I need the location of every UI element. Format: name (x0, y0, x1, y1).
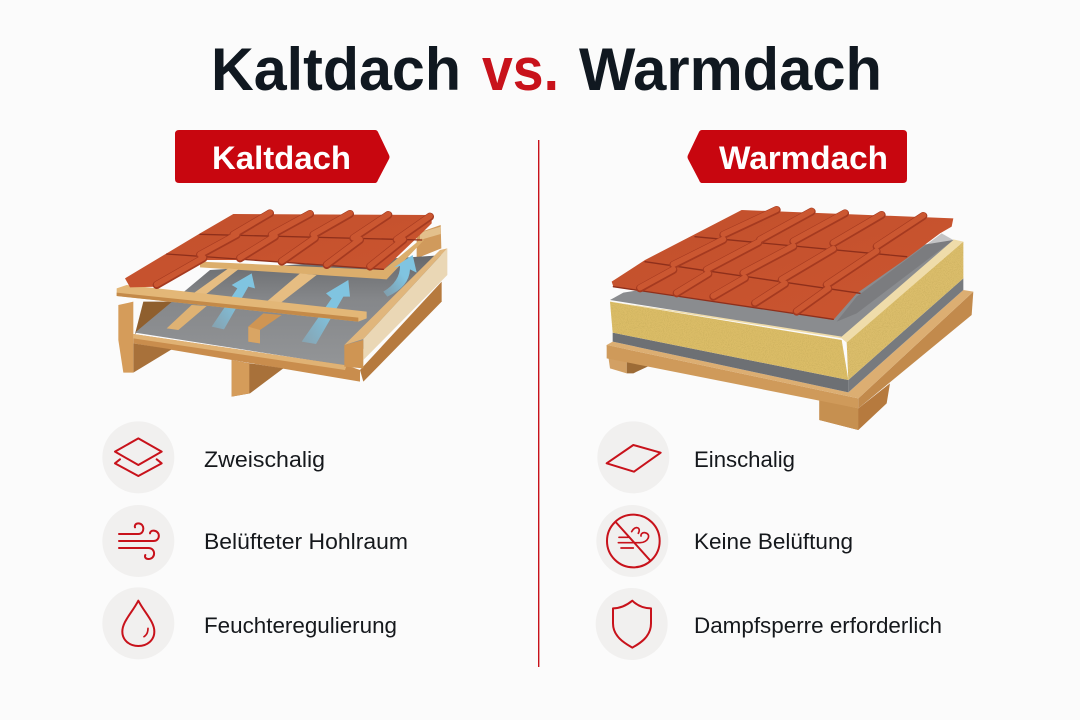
title: Kaltdach (211, 36, 461, 103)
badge: Warmdach: Warmdach (719, 140, 888, 176)
airflow arrow 2 (302, 280, 350, 344)
label: Belüfteter Hohlraum: Belüfteter Hohlraum (204, 529, 408, 554)
label: Feuchteregulierung: Feuchteregulierung (204, 613, 397, 638)
title: Warmdach (579, 36, 882, 103)
top membrane (610, 240, 953, 337)
title: vs. (482, 36, 559, 103)
label: Keine Belüftung: Keine Belüftung (694, 529, 853, 554)
icon: water drop (Feuchteregulierung) (102, 587, 174, 659)
badge: Warmdach (688, 130, 907, 183)
airflow arrow 3 (383, 255, 417, 297)
icon: single layer (Einschalig) (597, 421, 669, 493)
badge: Kaltdach: Kaltdach (212, 140, 351, 176)
roof tiles (125, 213, 432, 287)
label: Zweischalig: Zweischalig (204, 447, 325, 472)
roof tiles (612, 209, 953, 320)
insulation layer (610, 239, 963, 380)
icon: wind (Belüfteter Hohlraum) (102, 505, 174, 577)
airflow arrow 1 (212, 273, 255, 329)
back eave batten (200, 238, 424, 279)
label: Dampfsperre erforderlich: Dampfsperre erforderlich (694, 613, 942, 638)
icon: layers (Zweischalig) (102, 421, 174, 493)
badge: Kaltdach (175, 130, 390, 183)
center divider line (538, 140, 539, 667)
timber plate (607, 290, 973, 408)
icon: shield (Dampfsperre) (596, 588, 668, 660)
title (211, 36, 882, 103)
illustration: Kaltdach roof section (117, 213, 447, 397)
icon: no ventilation (Keine Belüftung) (596, 505, 668, 577)
label: Einschalig: Einschalig (694, 447, 795, 472)
illustration: Warmdach roof section (607, 209, 973, 430)
lower membrane layer (613, 278, 963, 392)
